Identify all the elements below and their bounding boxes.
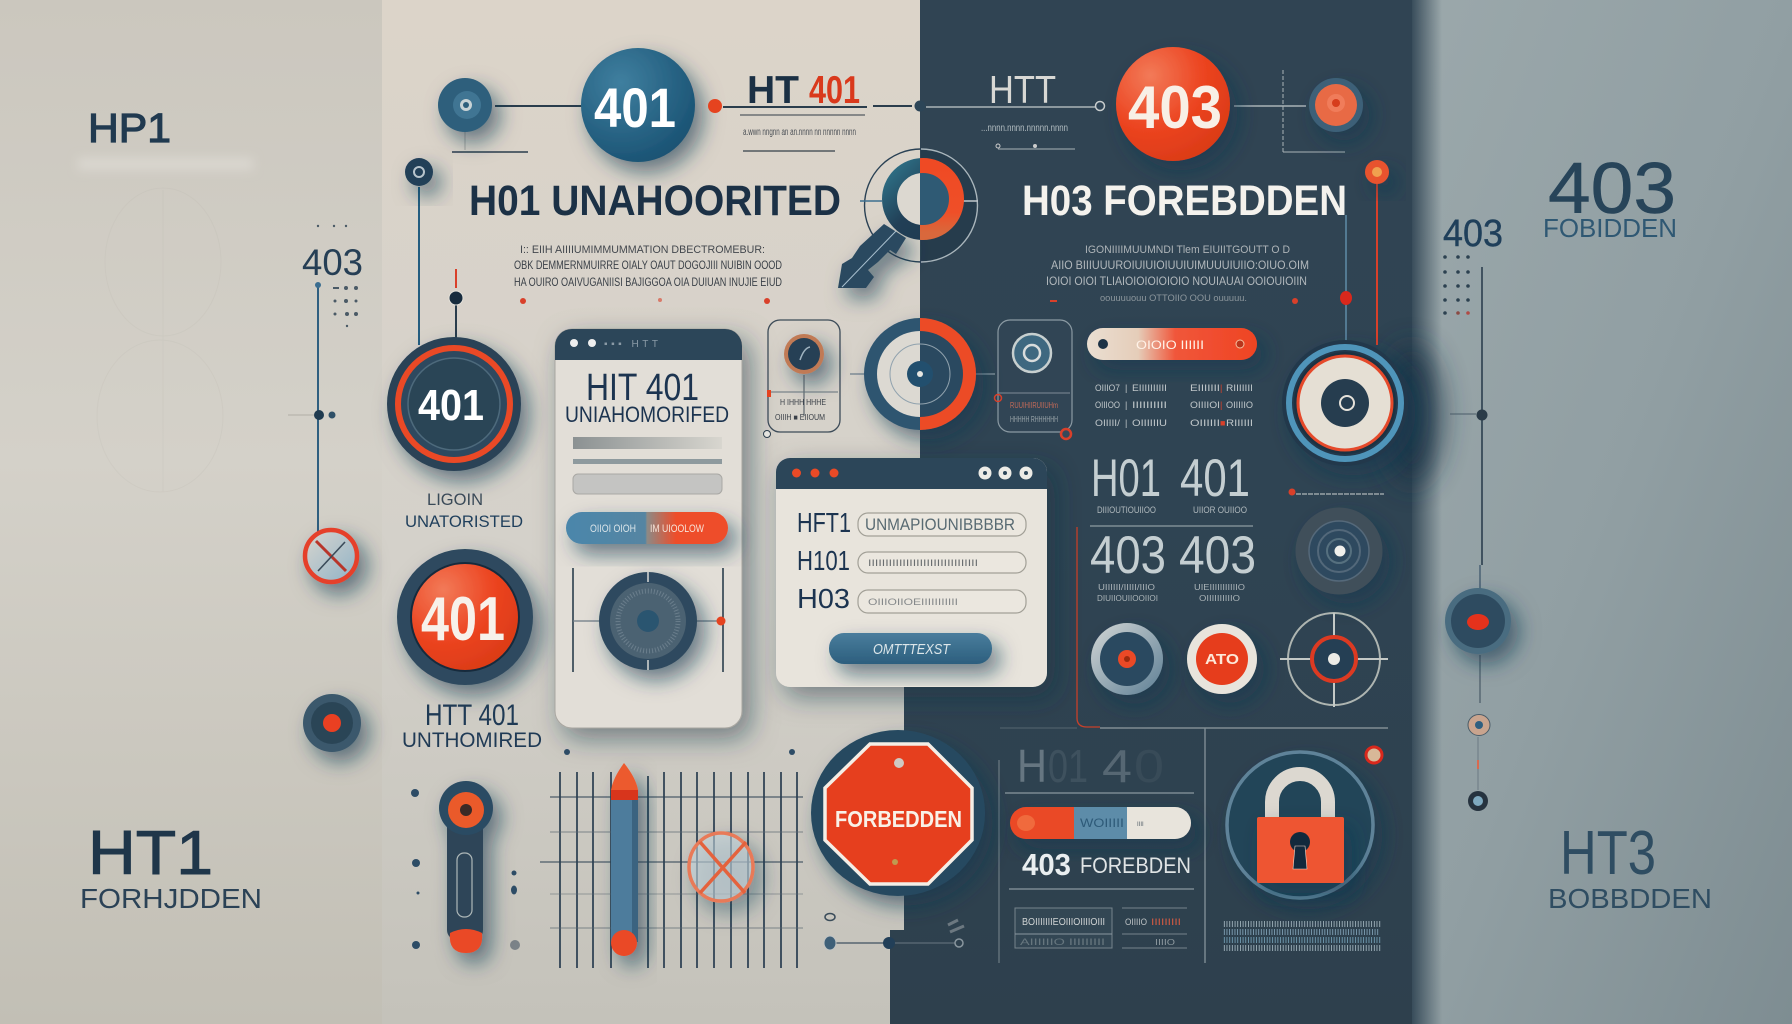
mini card text: RUUIHIIRUIIUHm (1010, 401, 1058, 410)
icon: knob with orange core (1309, 78, 1363, 132)
button: gradient pill: OIOIO IIIIII (1136, 338, 1204, 352)
label: BOBBDDEN: BOBBDDEN (1548, 883, 1712, 914)
card header: ▪▪▪ HTT (604, 339, 658, 350)
divider (1005, 792, 1194, 794)
fine print table: OIIIIIIU (1132, 418, 1167, 428)
label: large 403: 403 (1548, 149, 1676, 229)
icon: 401 ring gauge: 401 (418, 381, 484, 430)
description text: AIIO BIIIUUUROIUIUIOIUUIUIMUUUIUIIO:OIUO.OIM (1051, 258, 1309, 272)
heading: 401 unauthorized block (469, 177, 841, 304)
card title (565, 367, 729, 427)
card title: HIT 401 (586, 367, 699, 409)
stat: 403 403 (1090, 526, 1256, 585)
description text: IGONIIIIMUUMNDI Tlem EIUIITGOUTT O D (1085, 244, 1290, 256)
mini card text: OIIIH ■ EIIOUM (775, 413, 825, 422)
fine print block (1223, 920, 1381, 953)
top right status row (926, 47, 1363, 161)
status pill: IIII (1137, 822, 1144, 828)
fine print table (1095, 383, 1253, 428)
ghost label (1017, 740, 1164, 792)
stat captions (1097, 505, 1247, 515)
label: 403 forbidden: 403 (1022, 847, 1071, 882)
stat: H01 401: 401 (1180, 449, 1250, 508)
heading: 403 forbidden block (1022, 177, 1347, 304)
description text (1046, 244, 1309, 303)
field text: IIIIIIIIIIIIIIIIIIIIIIIIIIIIIIII (868, 558, 978, 568)
fine print table: | (1220, 400, 1222, 410)
fine print table: ■ (1220, 418, 1225, 428)
ghost label: 01 (1048, 740, 1088, 792)
fine print table: OIIIIIO (1226, 400, 1253, 410)
form labels: H101 (797, 545, 850, 576)
fine print table: | (1125, 400, 1127, 410)
label: HT 401: 401 (809, 69, 860, 112)
icon: stop sign forbidden: FORBEDDEN (835, 806, 962, 832)
icon: small red marker (1366, 747, 1382, 763)
panel: left outer background (0, 0, 382, 1024)
timeline with dots (288, 225, 358, 535)
description text: OBK DEMMERNMUIRRE OIALY OAUT DOGOJIII NUIBIN OOOD (514, 258, 782, 272)
fine print table: OIIIIOI (1190, 400, 1220, 410)
button: submit: OMTTTEXST (873, 641, 952, 658)
vertical connector: left with knob (405, 158, 463, 345)
form fields (858, 513, 1026, 613)
status pill: WOIIIII (1080, 816, 1124, 830)
label: 403 forbidden (1022, 847, 1191, 882)
fine print: a.wwn nngnn an an.nnnn nn nnnnn nnnn (743, 127, 856, 138)
connector below stop sign (824, 914, 964, 950)
icon: pencil (611, 763, 638, 956)
label: small 403: 403 (1443, 213, 1503, 255)
label: login unauthorized: LIGOIN (427, 490, 483, 509)
icon: 401 red gauge: 401 (421, 585, 505, 654)
stat captions: UIIOR OUIIOO (1193, 505, 1247, 515)
panel: centre dark background (890, 0, 1412, 1024)
label: HT3: HT3 (1560, 819, 1656, 888)
fine print (981, 123, 1075, 149)
fine print table: RIIIIIII (1226, 383, 1253, 393)
badge: 401 blue (581, 48, 695, 162)
red markers (1050, 298, 1298, 304)
small table: BOIIIIIIIEOIIIOIIIIOIII (1022, 917, 1105, 928)
dot: red (708, 99, 722, 113)
small table (1015, 908, 1187, 948)
icon: blue button with red dot (1091, 623, 1163, 695)
panel shadow edge (1412, 0, 1442, 1024)
form labels: H03 (797, 583, 850, 614)
icon: stop sign forbidden (811, 730, 985, 896)
key ring (882, 158, 920, 240)
button: submit (829, 633, 992, 664)
red caption line (1288, 488, 1384, 496)
description text: HA OUIRO OAIVUGANIISI BAJIGGOA OIA DUIUAN INUJIE EIUD (514, 275, 782, 289)
stat: H01 401: H01 (1091, 449, 1161, 508)
icon: crosshair target (1280, 613, 1388, 707)
ghost label: 4 (1102, 740, 1132, 792)
label: 403 small: 403 (302, 242, 363, 283)
label: FOBIDDEN: FOBIDDEN (1543, 213, 1677, 243)
icon: crossed circle (689, 833, 753, 901)
mini card text: H IHHH HHHE (780, 398, 826, 407)
button: split action: IM UIOOLOW (650, 523, 704, 535)
fine print table: IIIIIIIIII (1132, 400, 1167, 410)
stat captions: DIIIOUTIOUIIOO (1097, 505, 1156, 515)
small table: IIIIIIIII (1151, 917, 1181, 927)
fine print table: OIIIII/ (1095, 418, 1121, 428)
icon: red button: ATO (1205, 651, 1239, 668)
key blade (838, 224, 906, 288)
stat: H01 401 (1091, 449, 1250, 508)
icon: split target dial (850, 318, 995, 430)
field text: OIIIOIIOEIIIIIIIIIII (868, 597, 958, 607)
label: login unauthorized: UNATORISTED (405, 512, 523, 531)
fine print table: OIIIIII (1190, 418, 1220, 428)
fine print (743, 127, 856, 151)
icon: 401 red gauge (397, 549, 533, 685)
fine print table: | (1125, 418, 1127, 428)
fine print block: IIIIIIIIIIIIIIIIIIIIIIIIIIIIIIIIIIIIIIIIIIIIIIIIIIIIIIIIIII (1223, 944, 1381, 953)
label: HT1: HT1 (88, 819, 213, 888)
faint sketch circles (97, 188, 223, 492)
connector lines (452, 106, 912, 152)
badge: 401 blue: 401 (594, 76, 676, 139)
mini card text: HHHHH RHHHHHH (1010, 415, 1058, 424)
stat captions lower: OIIIIIIIIIIO (1199, 594, 1240, 603)
label: HTT 401 unthomired: UNTHOMIRED (402, 729, 542, 752)
divider and red bracket (999, 526, 1388, 963)
label: HTT 401 unthomired: HTT 401 (425, 699, 519, 732)
panel: right outer background (1412, 0, 1792, 1024)
dot: junction (914, 100, 926, 112)
badge: 403 red (1116, 47, 1230, 161)
window header (776, 458, 1047, 489)
label: HT 401 (747, 69, 860, 112)
icon: dark knob (303, 694, 361, 752)
divider (1009, 888, 1194, 890)
dot: hollow (1096, 102, 1104, 110)
field text (865, 515, 1015, 607)
form labels: HFT1 (797, 507, 851, 538)
shadow of dial on right panel (1382, 345, 1442, 485)
card title: UNIAHOMORIFED (565, 402, 729, 427)
description text: IOIOI OIOI TLIAIOIOIOIOIOIO NOUIAUAI OOIOUIOIIN (1046, 274, 1307, 288)
fine print table: OIIIO7 (1095, 383, 1120, 393)
fine print block: IIIIIIIIIIIIIIIIIIIIIIIIIIIIIIIIIIIIIIIIIIIIIIIIIIIIIIIIIII (1223, 928, 1379, 937)
icon: prohibited sign (305, 530, 357, 582)
icon: dark knob (1445, 588, 1511, 654)
icon: small bronze knob (784, 334, 824, 374)
button: split action (566, 512, 728, 544)
timeline with dots (1443, 255, 1488, 790)
icon: top small knob (438, 78, 492, 132)
blurred caption (78, 158, 253, 170)
icon: 401 ring gauge (387, 337, 521, 471)
icon: small ring (1013, 334, 1051, 372)
label: HTT: HTT (989, 69, 1056, 112)
stat captions lower: UIEIIIIIIIIIIIO (1194, 583, 1245, 592)
icon: dark concentric dial (1296, 508, 1382, 594)
panel: centre light background (382, 0, 922, 1024)
fine print table: OIIIOO (1095, 400, 1120, 410)
left outer column (78, 105, 363, 914)
dots (564, 749, 795, 755)
right outer column (1443, 149, 1712, 914)
card header (555, 329, 742, 360)
panel: forbidden status block (1005, 740, 1194, 948)
fine print table: | (1125, 383, 1127, 393)
ghost label: H (1017, 740, 1047, 792)
description text: oouuuuouu OTTOIIO OOU ouuuuu. (1100, 293, 1247, 303)
fine print table: EIIIIIIIIII (1132, 383, 1167, 393)
top left status row (438, 48, 926, 162)
grid lines (560, 772, 797, 968)
panel: login card (555, 329, 742, 728)
heading text: H03 FOREBDDEN (1022, 177, 1347, 225)
chart: grid with pencil and cross (540, 749, 803, 968)
panel: mini icon card left (764, 320, 840, 438)
red markers (520, 298, 770, 304)
fine print block: IIIIIIIIIIIIIIIIIIIIIIIIIIIIIIIIIIIIIIIIIIIIIIIIIIIIIIIIIII (1223, 936, 1381, 945)
small table: IIIIO (1155, 938, 1175, 947)
badge: 403 red: 403 (1128, 74, 1222, 141)
stat: 403 403: 403 (1090, 526, 1166, 585)
stat captions lower: UIIIIII/IIIII/IIIO (1098, 583, 1155, 592)
stat numbers (1090, 449, 1256, 603)
button: gradient pill (1087, 328, 1257, 360)
small table: OIIIIO (1125, 917, 1147, 927)
vertical connector: right with knobs (1340, 160, 1389, 345)
icon: key with half rings (838, 148, 978, 288)
small table: AIIIIIIO IIIIIIIII (1020, 937, 1105, 947)
stat: 403 403: 403 (1179, 526, 1256, 585)
description text: I:: EIIH AIIIIUMIMMUMMATION DBECTROMEBUR: (520, 244, 765, 256)
label: 403 forbidden: FOREBDEN (1080, 853, 1191, 878)
panel: mini icon card right (994, 320, 1072, 439)
icon: orange handle tool (411, 781, 520, 953)
form labels (797, 507, 851, 614)
icon: red button (1187, 624, 1257, 694)
panel: browser window (776, 458, 1047, 687)
status pill (1010, 807, 1191, 839)
ghost label: 0 (1134, 740, 1164, 792)
label: HTT 401 unthomired (402, 699, 542, 752)
mini card text (994, 393, 1071, 439)
dial with crosshair (573, 568, 726, 672)
mini card text (764, 375, 838, 438)
stat captions lower (1097, 583, 1245, 603)
icon: large eye dial (1282, 340, 1408, 466)
fine print: ...nnnn.nnnn.nnnnn.nnnn (981, 123, 1068, 134)
connector lines (926, 70, 1345, 152)
label: FORHJDDEN: FORHJDDEN (80, 883, 262, 914)
icon: padlock (1227, 752, 1373, 898)
label: HT 401: HT (747, 69, 799, 112)
field text: UNMAPIOUNIBBBBR (865, 515, 1015, 534)
label: HP1: HP1 (88, 105, 171, 151)
label: login unauthorized (405, 490, 523, 531)
fine print block: IIIIIIIIIIIIIIIIIIIIIIIIIIIIIIIIIIIIIIIIIIIIIIIIIIIIIIIIIII (1223, 920, 1381, 929)
stat captions lower: DIUIIOUIIOOIIOI (1097, 594, 1158, 603)
fine print table: | (1220, 383, 1222, 393)
fine print table: RIIIIII (1226, 418, 1253, 428)
form fields (573, 437, 722, 494)
button: split action: OIIOI OIOH (590, 523, 636, 535)
fine print table: EIIIIIII (1190, 383, 1220, 393)
icon: small markers (1468, 714, 1490, 811)
description text (514, 244, 782, 289)
heading text: H01 UNAHOORITED (469, 177, 841, 225)
